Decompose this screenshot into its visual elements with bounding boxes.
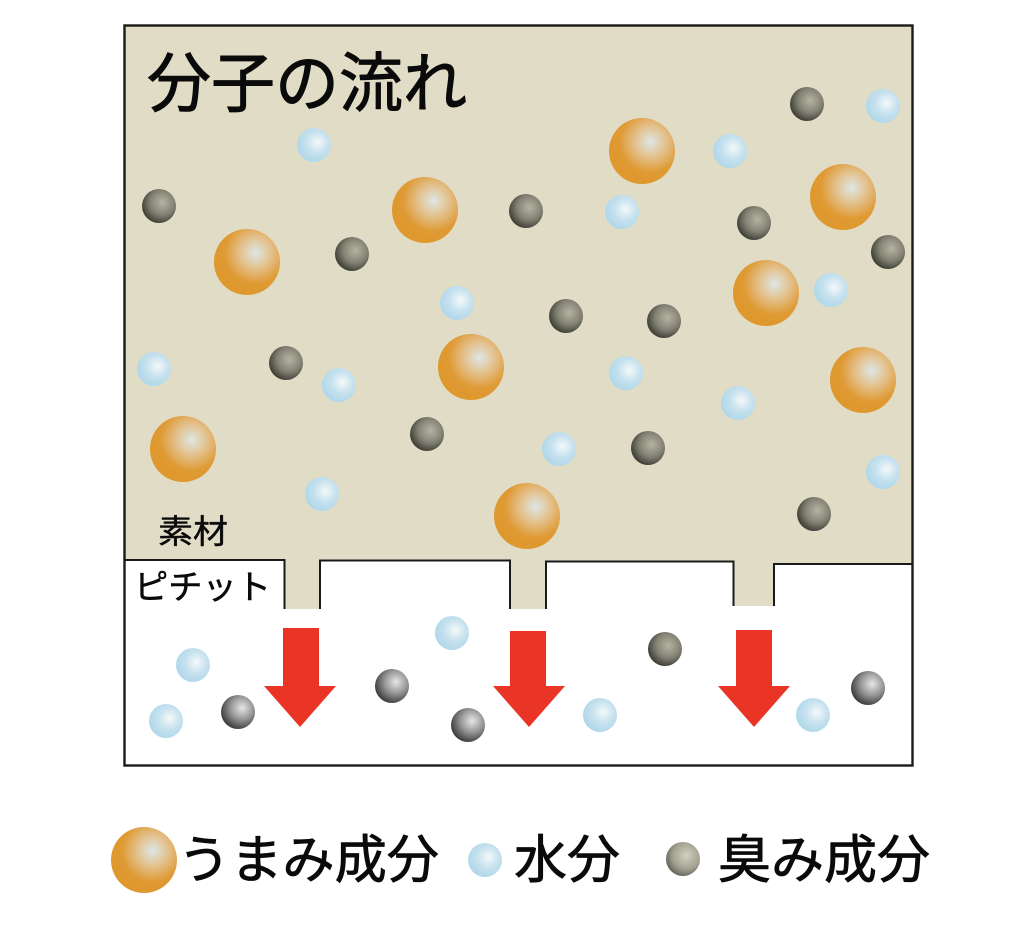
odor molecules in material [142, 87, 905, 531]
pipette outline [124, 560, 912, 609]
legend: odor: 臭み成分 [718, 832, 930, 890]
panel: material area [124, 25, 912, 609]
legend: umami: うまみ成分 [178, 832, 439, 890]
legend: water [468, 832, 620, 890]
arrow: left [264, 628, 336, 727]
arrow: middle [493, 631, 565, 727]
legend: umami [111, 827, 439, 893]
legend: water: 水分 [514, 832, 620, 890]
water molecules in material [137, 89, 900, 511]
umami molecules [150, 118, 896, 549]
water molecules in pipette [149, 616, 830, 738]
label: pipette: ピチット [134, 569, 271, 607]
label: material: 素材 [158, 513, 228, 550]
arrow: right [718, 630, 790, 727]
title: 分子の流れ [147, 47, 467, 120]
panel: outer frame [124, 26, 912, 766]
odor molecules in pipette [221, 632, 885, 742]
